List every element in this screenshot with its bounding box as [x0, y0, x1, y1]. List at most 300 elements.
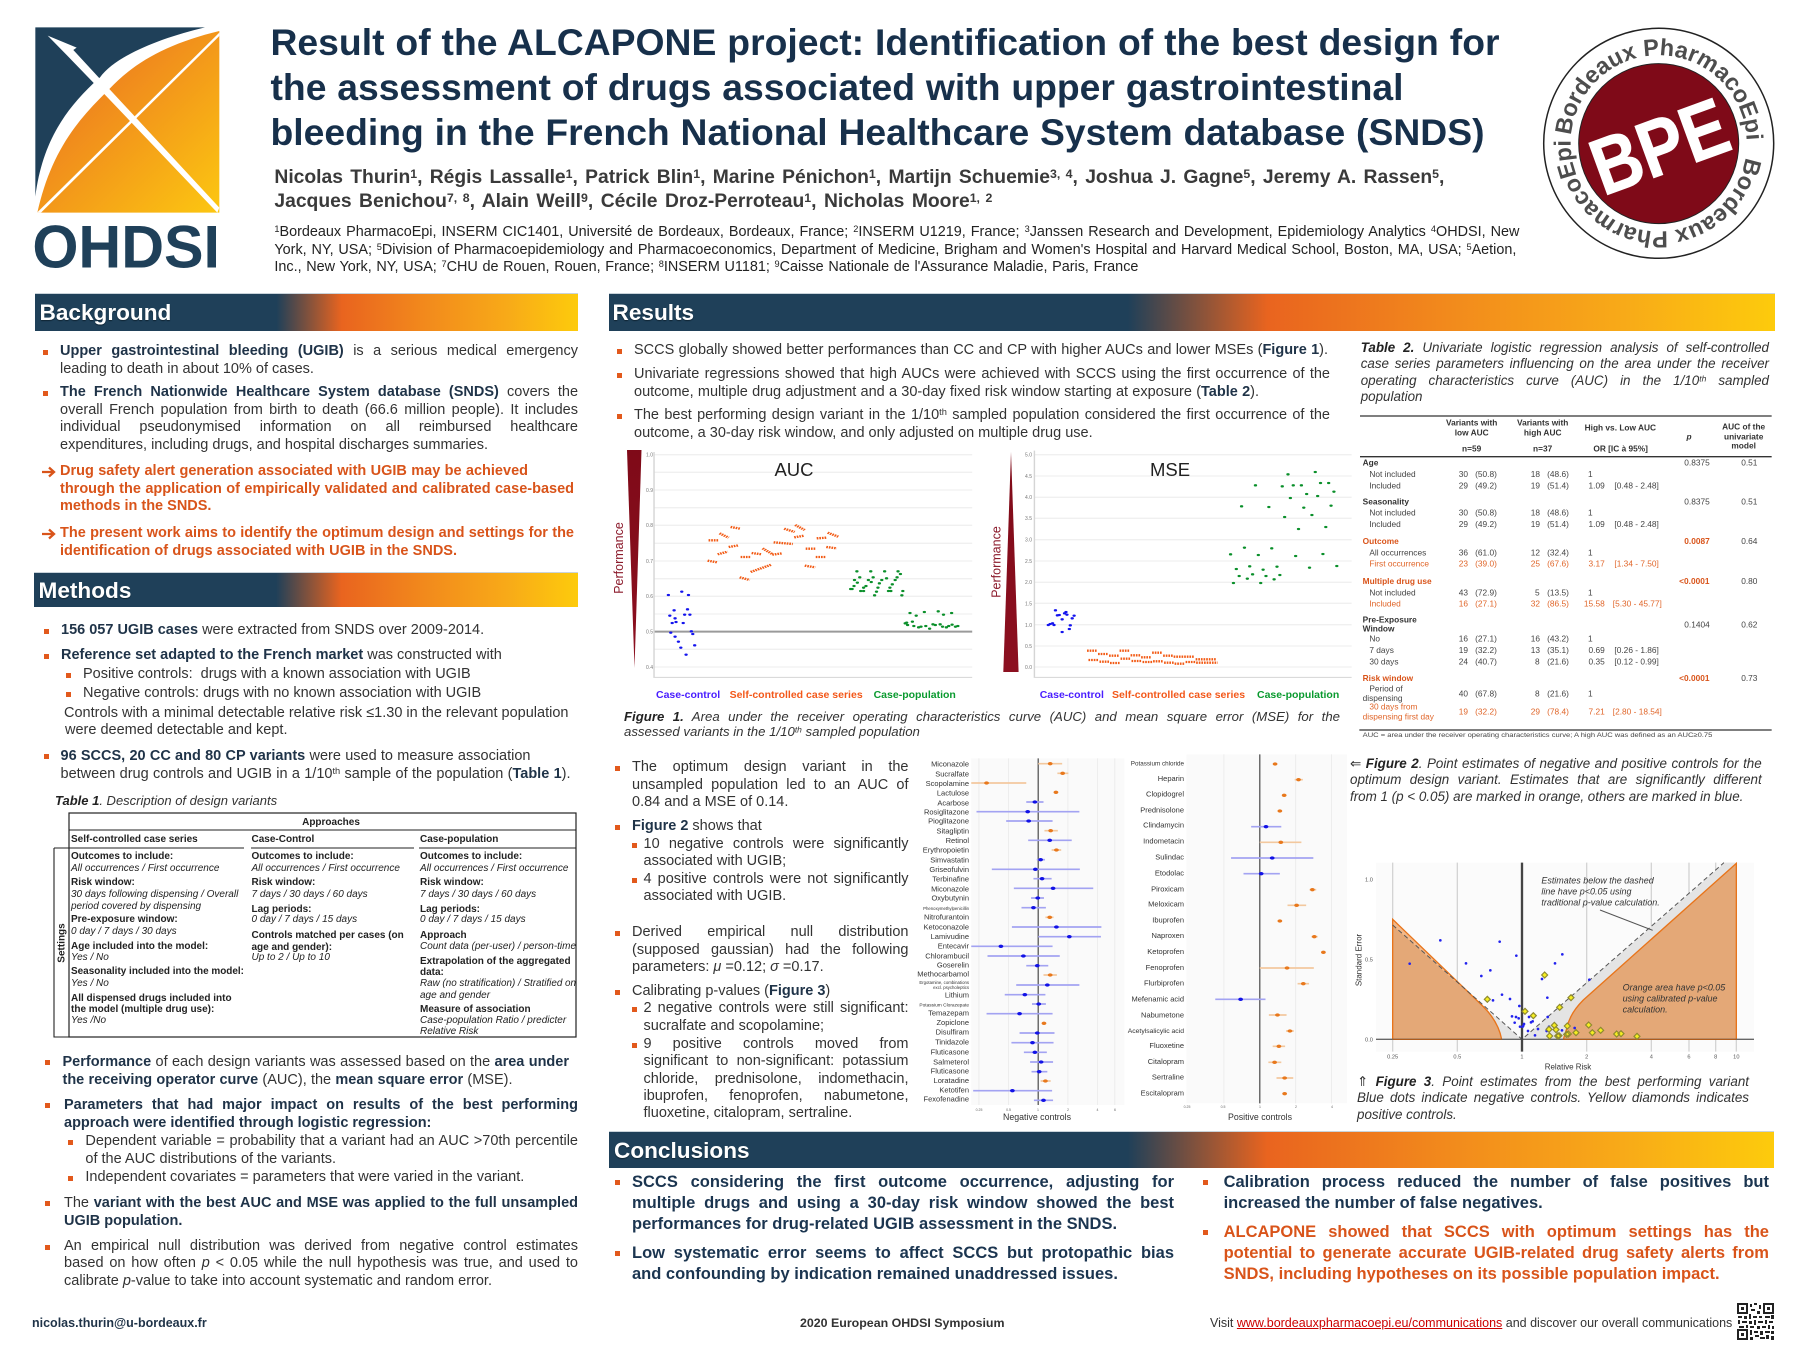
- text: independent covariates: Independent covariates = parameters that were varied in the variant.: [85, 1169, 524, 1185]
- table 1: description of design variants: Extrapolation of the aggregated: [420, 956, 571, 967]
- figure 2: positive controls forest plot: 4: [1331, 1105, 1333, 1109]
- figure 1: AUC strip chart: 1.0: [646, 452, 653, 458]
- logo: OHDSI: [32, 27, 220, 281]
- figure 2: negative controls forest plot: Loratadine: [934, 1076, 969, 1085]
- figure 1: AUC strip chart: [646, 452, 972, 677]
- figure 2: negative controls forest plot: Methocarbamol: [917, 970, 969, 979]
- caption: figure 2: [1350, 756, 1762, 804]
- table 1: description of design variants: Count data (per-user) / person-time: [420, 941, 576, 952]
- text: reference set: were deemed detectable and kept.: [65, 722, 287, 738]
- table 2: univariate logistic regression: Included: [1369, 480, 1401, 490]
- heading: Background: [34, 293, 578, 331]
- caption: table 1: Table 1. Description of design variants: [55, 793, 277, 808]
- text: best variant in sample: [617, 407, 1330, 441]
- text: empirical null parameters: [615, 924, 908, 975]
- text: best variant: UGIB population.: [64, 1213, 182, 1229]
- table 1: description of design variants: Settings: [56, 923, 68, 963]
- figure 2: negative controls forest plot: Ergotamine, combinations: [919, 980, 969, 985]
- table 2: univariate logistic regression: Included: [1369, 519, 1401, 529]
- table 2: univariate logistic regression: n=37: [1533, 443, 1553, 453]
- authors: Nicolas Thurin1, Régis Lassalle1, Patrick Blin1, Marine Pénichon1, Martijn Schuemie3, 4, Joshua J. Gagne5, Jeremy A. Rassen5,: [274, 167, 1444, 188]
- callout: drug safety alert generation: Drug safety alert generation associated with UGIB may be achieved: [60, 463, 528, 479]
- table 2: univariate logistic regression: 16: [1459, 599, 1468, 609]
- text: reference set: Controls with a minimal detectable relative risk ≤1.30 in the relevant population: [64, 705, 568, 721]
- text: univariate regressions: outcome, multiple drug adjustment and a 30-day fixed risk window starting at exposure (Table 2).: [634, 384, 1259, 400]
- text: empirical null parameters: (supposed gaussian) had the following: [632, 942, 908, 958]
- heading: Background: Background: [40, 300, 171, 325]
- heading: Conclusions: [609, 1131, 1774, 1168]
- table 2: univariate logistic regression: (50.8): [1475, 508, 1497, 518]
- conclusion: calibration process: [1203, 1173, 1769, 1212]
- table 2: univariate logistic regression: Seasonality: [1363, 496, 1409, 506]
- figure 1: AUC strip chart: AUC: [774, 459, 814, 480]
- figure 2: negative controls forest plot: Oxybutynin: [931, 894, 969, 903]
- table 2: univariate logistic regression: (51.4): [1547, 480, 1569, 490]
- text: SNDS description: The French Nationwide Healthcare System database (SNDS) covers the: [60, 384, 578, 400]
- figure 2: negative controls forest plot: [917, 758, 1124, 1122]
- caption: figure 3: [1356, 1074, 1750, 1122]
- text: figure 2 findings: Figure 2 shows that: [632, 818, 762, 834]
- table 2: univariate logistic regression: Pre-Exposure: [1363, 615, 1417, 625]
- text: variants used: 96 SCCS, 20 CC and 80 CP variants were used to measure association: [60, 748, 530, 764]
- caption: table 2: Table 2. Univariate logistic regression analysis of self-controlled: [1361, 340, 1769, 354]
- table 1: description of design variants: Controls matched per cases (on: [252, 930, 404, 941]
- text: reference set: Positive controls: drugs with a known association with UGIB: [83, 666, 471, 682]
- table 2: univariate logistic regression: 29: [1531, 706, 1540, 716]
- table 2: univariate logistic regression: 1.09: [1589, 480, 1605, 490]
- table 2: univariate logistic regression: 0.51: [1741, 457, 1758, 467]
- table 2: univariate logistic regression: 19: [1459, 645, 1468, 655]
- figure 2: positive controls forest plot: Escitalopram: [1141, 1088, 1184, 1097]
- figure 2: negative controls forest plot: Disulfiram: [936, 1028, 969, 1037]
- figure 2: positive controls forest plot: Fluoxetine: [1149, 1041, 1184, 1050]
- figure 3: funnel plot of point estimates: Orange area have p<0.05: [1623, 982, 1726, 992]
- table 2: univariate logistic regression: Outcome: [1363, 536, 1399, 546]
- table 1: description of design variants: Lag periods:: [252, 904, 312, 915]
- figure 1: legend for AUC chart: Case-population: [874, 689, 956, 701]
- table 2: univariate logistic regression: 1: [1588, 547, 1593, 557]
- text: calibrating p-values: significant to non-significant: potassium: [644, 1053, 908, 1069]
- figure 3: funnel plot of point estimates: 1.0: [1365, 877, 1373, 883]
- figure 1: MSE strip chart: 4.0: [1025, 495, 1032, 501]
- text: figure 2 findings: associated with UGIB.: [644, 888, 786, 904]
- text: calibrating p-values: [615, 983, 908, 1121]
- figure 2: negative controls forest plot: Lamivudine: [931, 932, 969, 941]
- table 2: univariate logistic regression: high AUC: [1524, 427, 1561, 437]
- text: empirical null: calibrate p-value to take into account systematic and random error.: [64, 1273, 492, 1289]
- figure 3: funnel plot of point estimates: 2: [1585, 1054, 1588, 1060]
- figure 2: positive controls forest plot: Piroxicam: [1151, 884, 1184, 893]
- table 1: description of design variants: Raw (no stratification) / Stratified on: [420, 978, 576, 989]
- table 2: univariate logistic regression: [0.12 - 0.99]: [1614, 656, 1659, 666]
- figure 2: positive controls forest plot: Acetylsalicylic acid: [1128, 1028, 1184, 1035]
- table 1: description of design variants: 0 day / 7 days / 15 days: [252, 914, 357, 925]
- logo: Bordeaux PharmacoEpi: Bordeaux PharmacoEpi: [1555, 38, 1764, 139]
- conclusion: ALCAPONE potential: ALCAPONE showed that SCCS with optimum settings has the: [1224, 1223, 1769, 1241]
- table 2: univariate logistic regression: 12: [1531, 547, 1540, 557]
- figure 2: negative controls forest plot: Ketoconazole: [924, 923, 969, 932]
- table 1: description of design variants: Self-controlled case series: [71, 834, 198, 845]
- table 2: univariate logistic regression: 24: [1459, 656, 1468, 666]
- authors: [274, 167, 1444, 212]
- table 1: description of design variants: Case-Control: [252, 834, 315, 845]
- table 2: univariate logistic regression: 0.51: [1741, 496, 1758, 506]
- figure 2: positive controls forest plot: Heparin: [1158, 774, 1184, 783]
- text: best variant: The variant with the best AUC and MSE was applied to the full unsampled: [64, 1195, 578, 1211]
- text: optimum design: [615, 759, 909, 810]
- table 1: description of design variants: Lag periods:: [420, 904, 480, 915]
- caption: figure 1: Figure 1. Area under the receiver operating characteristics curve (AUC) and mean square error (MSE) for the: [624, 709, 1340, 724]
- title: bleeding in the French National Healthcare System database (SNDS): [270, 111, 1484, 153]
- table 2: univariate logistic regression: 30 days from: [1369, 702, 1418, 712]
- figure 1: AUC strip chart: 0.4: [646, 665, 653, 671]
- title: [270, 20, 1500, 153]
- table 2: univariate logistic regression: (32.2): [1475, 706, 1497, 716]
- figure 2: positive controls forest plot: Flurbiprofen: [1144, 978, 1184, 987]
- table 2: univariate logistic regression: 1: [1588, 688, 1593, 698]
- figure 1: legend for MSE chart: Self-controlled case series: [1112, 689, 1245, 701]
- table 1: description of design variants: All dispensed drugs included into: [71, 993, 232, 1004]
- figure 3: funnel plot of point estimates: calculation.: [1623, 1005, 1668, 1015]
- table 1: description of design variants: Outcomes to include:: [71, 851, 173, 862]
- table 2: univariate logistic regression: 29: [1459, 480, 1468, 490]
- text: SNDS description: [43, 384, 578, 453]
- text: best variant in sample: The best performing design variant in the 1/10th sampled population considered the first occurrence of the: [634, 407, 1330, 423]
- figure 2: positive controls forest plot: Citalopram: [1148, 1057, 1184, 1066]
- table 2: univariate logistic regression: (35.1): [1547, 645, 1569, 655]
- table 2: univariate logistic regression: univariate: [1724, 431, 1764, 441]
- figure 1: legend for MSE chart: Case-population: [1257, 689, 1339, 701]
- text: calibrating p-values: chloride, prednisolone, indomethacin,: [644, 1071, 908, 1087]
- text: calibrating p-values: sucralfate and scopolamine;: [644, 1018, 824, 1034]
- table 2: univariate logistic regression: (21.6): [1547, 688, 1569, 698]
- conclusion: ALCAPONE potential: potential to generate accurate UGIB-related drug safety alerts from: [1224, 1244, 1769, 1262]
- table 2: univariate logistic regression: Window: [1363, 623, 1395, 633]
- text: empirical null parameters: Derived empirical null distribution: [632, 924, 908, 940]
- figure 2: negative controls forest plot: Fexofenadine: [924, 1094, 969, 1103]
- figure 1: AUC strip chart: 0.7: [646, 559, 653, 565]
- table 2: univariate logistic regression: Age: [1363, 458, 1379, 468]
- text: SCCS better: SCCS globally showed better performances than CC and CP with higher AUCs and lower MSEs (Figure 1).: [634, 342, 1328, 358]
- text: calibrating p-values: fluoxetine, citalopram, sertraline.: [644, 1105, 852, 1121]
- table 2: univariate logistic regression: (49.2): [1475, 480, 1497, 490]
- table 1: description of design variants: Outcomes to include:: [252, 851, 354, 862]
- caption: figure 1: assessed variants in the 1/10th sampled population: [624, 724, 920, 739]
- figure 3: funnel plot of point estimates: Estimates below the dashed: [1541, 875, 1655, 885]
- figure 2: positive controls forest plot: [1128, 754, 1347, 1122]
- text: variants used: between drug controls and UGIB in a 1/10th sample of the population (Table 1).: [60, 766, 571, 782]
- table 2: univariate logistic regression: 19: [1531, 519, 1540, 529]
- table 1: description of design variants: Risk window:: [252, 877, 315, 888]
- text: empirical null: An empirical null distribution was derived from negative control estimates: [64, 1238, 578, 1254]
- text: dependent variable: Dependent variable = probability that a variant had an AUC >70th percentile: [85, 1133, 578, 1149]
- figure 1: MSE strip chart: 1.5: [1025, 602, 1032, 608]
- table 1: description of design variants: age and gender):: [252, 942, 332, 953]
- footer: email: nicolas.thurin@u-bordeaux.fr: [32, 1316, 207, 1330]
- table 2: univariate logistic regression: (49.2): [1475, 519, 1497, 529]
- callout: aim of the work: [42, 525, 574, 559]
- figure 2: positive controls forest plot: 2: [1295, 1105, 1297, 1109]
- table 1: description of design variants: 30 days following dispensing / Overall: [71, 889, 239, 900]
- table 2: univariate logistic regression: 1.09: [1589, 519, 1605, 529]
- table 2: univariate logistic regression: 1: [1588, 508, 1593, 518]
- table 2: univariate logistic regression: 1: [1588, 587, 1593, 597]
- table 2: univariate logistic regression: 32: [1531, 599, 1540, 609]
- figure 3: funnel plot of point estimates: traditional p-value calculation.: [1541, 898, 1660, 908]
- figure 2: negative controls forest plot: 4: [1097, 1108, 1099, 1112]
- figure 3: funnel plot of point estimates: Standard Error: [1355, 933, 1364, 986]
- table 1: description of design variants: period covered by dispensing: [70, 901, 202, 912]
- table 1: description of design variants: [54, 813, 576, 1037]
- text: figure 2 findings: [615, 818, 908, 904]
- figure 2: negative controls forest plot: Goserelin: [937, 960, 969, 969]
- table 2: univariate logistic regression: <0.0001: [1679, 673, 1710, 683]
- table 1: description of design variants: Approach: [420, 930, 467, 941]
- figure 2: negative controls forest plot: Tinidazole: [935, 1038, 969, 1047]
- table 1: description of design variants: Risk window:: [420, 877, 484, 888]
- figure 3: funnel plot of point estimates: 0.0: [1365, 1038, 1373, 1044]
- figure 2: negative controls forest plot: Acarbose: [937, 798, 969, 807]
- logo: Bordeaux PharmacoEpi: [1542, 28, 1774, 259]
- text: figure 2 findings: 4 positive controls were not significantly: [644, 871, 908, 887]
- figure 2: positive controls forest plot: Mefenamic acid: [1131, 994, 1184, 1003]
- table 1: description of design variants: Case-population: [420, 834, 498, 845]
- text: SNDS description: overall French population from birth to death (66.6 million people). It includes: [60, 402, 578, 418]
- logo: Bordeaux PharmacoEpi: Bordeaux PharmacoEpi: [1554, 142, 1762, 248]
- table 2: univariate logistic regression: 19: [1459, 706, 1468, 716]
- text: UGIB definition: [43, 343, 578, 377]
- figure 2: positive controls forest plot: 0.5: [1221, 1105, 1225, 1109]
- figure 1: AUC strip chart: 0.5: [646, 630, 653, 636]
- table 2: univariate logistic regression: (13.5): [1547, 587, 1569, 597]
- figure 2: negative controls forest plot: Scopolamine: [926, 779, 969, 788]
- table 2: univariate logistic regression: [2.80 - 18.54]: [1613, 706, 1662, 716]
- figure 3: funnel plot of point estimates: line have p<0.05 using: [1541, 886, 1632, 896]
- callout: drug safety alert generation: [42, 463, 574, 514]
- table 2: univariate logistic regression: 23: [1459, 559, 1468, 569]
- table 2: univariate logistic regression: [0.48 - 2.48]: [1614, 480, 1659, 490]
- text: calibrating p-values: Calibrating p-values (Figure 3): [632, 983, 830, 999]
- table 2: univariate logistic regression: 0.62: [1741, 619, 1758, 629]
- table 2: univariate logistic regression: 7 days: [1369, 645, 1394, 655]
- table 2: univariate logistic regression: OR [IC à 95%]: [1593, 443, 1648, 453]
- text: UGIB cases: 156 057 UGIB cases were extracted from SNDS over 2009-2014.: [61, 622, 484, 638]
- conclusion: best SCCS settings: SCCS considering the first outcome occurrence, adjusting for: [632, 1173, 1174, 1191]
- table 1: description of design variants: Pre-exposure window:: [71, 914, 178, 925]
- table 2: univariate logistic regression: (27.1): [1475, 634, 1497, 644]
- figure 2: negative controls forest plot: Erythropoietin: [923, 846, 969, 855]
- callout: drug safety alert generation: methods in the SNDS.: [60, 498, 211, 514]
- figure 1: AUC strip chart: 0.8: [646, 523, 653, 529]
- table 2: univariate logistic regression: 0.80: [1741, 576, 1758, 586]
- figure 2: negative controls forest plot: Lithium: [945, 991, 969, 1000]
- figure 2: positive controls forest plot: Etodolac: [1155, 868, 1184, 877]
- table 1: description of design variants: Measure of association: [420, 1004, 531, 1015]
- table 2: univariate logistic regression: 3.17: [1589, 559, 1605, 569]
- table 2: univariate logistic regression: AUC of the: [1722, 422, 1766, 432]
- table 2: univariate logistic regression: 0.0087: [1684, 536, 1710, 546]
- table 2: univariate logistic regression: 18: [1531, 469, 1540, 479]
- table 2: univariate logistic regression: (86.5): [1547, 599, 1569, 609]
- figure 2: negative controls forest plot: Temazepam: [928, 1009, 969, 1018]
- figure 2: positive controls forest plot: Nabumetone: [1141, 1010, 1184, 1019]
- figure 2: negative controls forest plot: Phenoxymethylpenicillin: [923, 906, 970, 911]
- table 2: univariate logistic regression: 16: [1531, 634, 1540, 644]
- QR code: [1737, 1303, 1774, 1340]
- text: empirical null: [45, 1238, 578, 1289]
- table 1: description of design variants: 7 days / 30 days / 60 days: [252, 889, 368, 900]
- figure 2: negative controls forest plot: Chlorambucil: [925, 951, 969, 960]
- heading: Conclusions: Conclusions: [614, 1138, 750, 1163]
- table 2: univariate logistic regression: (78.4): [1547, 706, 1569, 716]
- figure 2: negative controls forest plot: Ketotifen: [939, 1086, 969, 1095]
- table 2: univariate logistic regression: 1: [1588, 634, 1593, 644]
- text: SNDS description: individual pseudonymised information on all reimbursed healthcare: [60, 419, 578, 435]
- table 2: univariate logistic regression: (48.6): [1547, 508, 1569, 518]
- table 2: univariate logistic regression: (40.7): [1475, 656, 1497, 666]
- table 1: description of design variants: 7 days / 30 days / 60 days: [420, 889, 536, 900]
- conclusion: best SCCS settings: performances for drug-related UGIB assessment in the SNDS.: [632, 1215, 1117, 1233]
- text: calibrating p-values: 2 negative controls were still significant:: [644, 1000, 908, 1016]
- table 2: univariate logistic regression: Variants with: [1517, 418, 1568, 428]
- conclusion: best SCCS settings: [615, 1173, 1174, 1233]
- figure 3: funnel plot of point estimates: 1: [1520, 1054, 1524, 1060]
- table 1: description of design variants: Age included into the model:: [71, 941, 208, 952]
- table 2: univariate logistic regression: 18: [1531, 508, 1540, 518]
- text: empirical null parameters: parameters: μ =0.12; σ =0.17.: [632, 959, 824, 975]
- table 2: univariate logistic regression: 15.58: [1584, 599, 1605, 609]
- figure 2: positive controls forest plot: 1: [1259, 1105, 1261, 1109]
- caption: table 2: population: [1361, 389, 1422, 404]
- table 2: univariate logistic regression: [1.34 - 7.50]: [1614, 559, 1659, 569]
- text: variants used: [44, 748, 571, 782]
- caption: table 2: [1360, 340, 1770, 404]
- table 2: univariate logistic regression: All occurrences: [1369, 547, 1426, 557]
- figure 2: negative controls forest plot: 0.25: [976, 1108, 982, 1112]
- table 2: univariate logistic regression: low AUC: [1455, 427, 1489, 437]
- table 2: univariate logistic regression: 30: [1459, 469, 1468, 479]
- figure 2: positive controls forest plot: Potassium chloride: [1131, 761, 1184, 768]
- table 2: univariate logistic regression: 13: [1531, 645, 1540, 655]
- table 2: univariate logistic regression: (32.2): [1475, 645, 1497, 655]
- figure 1: MSE strip chart: 1.0: [1025, 623, 1032, 629]
- figure 3: funnel plot of point estimates: using calibrated p-value: [1623, 993, 1718, 1003]
- figure 1: AUC strip chart: 0.9: [646, 488, 653, 494]
- figure 1: MSE strip chart: 0.0: [1025, 665, 1032, 671]
- text: dependent variable: of the AUC distributions of the variants.: [85, 1151, 336, 1167]
- figure 1: legend for AUC chart: [656, 689, 956, 701]
- table 1: description of design variants: age and gender: [420, 990, 491, 1001]
- text: performance: the receiving operator curve (AUC), the mean square error (MSE).: [62, 1072, 513, 1088]
- heading: Results: Results: [612, 300, 694, 325]
- figure 1: performance wedge for MSE: Performance: [990, 526, 1004, 598]
- table 2: univariate logistic regression: 5: [1535, 587, 1540, 597]
- table 2: univariate logistic regression: Variants with: [1446, 418, 1497, 428]
- figure 2: negative controls forest plot: 0.5: [1006, 1108, 1011, 1112]
- table 2: univariate logistic regression: 43: [1459, 587, 1468, 597]
- text: best variant: [45, 1195, 578, 1229]
- table 2: univariate logistic regression: 19: [1531, 480, 1540, 490]
- conclusion: best SCCS settings: multiple drugs and using a 30-day risk window showed the best: [632, 1194, 1174, 1212]
- heading: Results: [609, 293, 1775, 331]
- table 2: univariate logistic regression: 7.21: [1589, 706, 1605, 716]
- figure 1: performance wedge for MSE: [990, 452, 1019, 672]
- caption: figure 2: optimum design variant. Estimates that are significantly different: [1350, 772, 1762, 787]
- text: performance: [45, 1054, 569, 1088]
- table 2: univariate logistic regression: (72.9): [1475, 587, 1497, 597]
- text: figure 2 findings: associated with UGIB;: [644, 853, 786, 869]
- logo: OHDSI: OHDSI: [32, 213, 220, 281]
- figure 2: negative controls forest plot: Lactulose: [937, 788, 969, 797]
- table 2: univariate logistic regression: 0.69: [1589, 645, 1605, 655]
- figure 3: funnel plot of point estimates: 6: [1687, 1054, 1691, 1060]
- figure 1: MSE strip chart: MSE: [1150, 459, 1190, 480]
- caption: figure 3: ⇑ Figure 3. Point estimates from the best performing variant: [1357, 1074, 1749, 1088]
- table 2: univariate logistic regression: 8: [1535, 656, 1540, 666]
- table 2: univariate logistic regression: Risk window: [1363, 673, 1414, 683]
- text: optimum design: 0.84 and a MSE of 0.14.: [632, 794, 788, 810]
- table 1: description of design variants: All occurrences / First occurrence: [70, 863, 220, 874]
- text: UGIB definition: Upper gastrointestinal bleeding (UGIB) is a serious medical emergency: [60, 343, 578, 359]
- figure 2: positive controls forest plot: 0.25: [1184, 1105, 1190, 1109]
- figure 2: negative controls forest plot: Miconazole: [931, 884, 969, 893]
- table 1: description of design variants: the model (multiple drug use):: [71, 1004, 214, 1015]
- authors: Jacques Benichou7, 8, Alain Weill9, Cécile Droz-Perroteau1, Nicholas Moore1, 2: [274, 191, 992, 212]
- text: parameters: [45, 1097, 578, 1131]
- table 2: univariate logistic regression: High vs. Low AUC: [1585, 422, 1656, 432]
- caption: table 2: operating characteristics curve (AUC) in the 1/10th sampled: [1361, 373, 1769, 388]
- table 2: univariate logistic regression: n=59: [1462, 443, 1482, 453]
- figure 3: funnel plot of point estimates: 0.5: [1365, 958, 1373, 964]
- table 1: description of design variants: All occurrences / First occurrence: [419, 863, 569, 874]
- callout: drug safety alert generation: through the application of empirically validated and calibrated case-based: [60, 481, 574, 497]
- figure 2: negative controls forest plot: Rosiglitazone: [924, 807, 969, 816]
- figure 2: negative controls forest plot: Miconazole: [931, 759, 969, 768]
- table 1: description of design variants: Up to 2 / Up to 10: [252, 952, 330, 963]
- caption: figure 3: Blue dots indicate negative controls. Yellow diamonds indicates: [1357, 1090, 1749, 1105]
- text: performance: Performance of each design variants was assessed based on the area under: [62, 1054, 569, 1070]
- table 1: description of design variants: All occurrences / First occurrence: [250, 863, 400, 874]
- conclusion: ALCAPONE potential: SNDS, including hypotheses on its possible population impact.: [1224, 1265, 1720, 1283]
- text: calibrating p-values: ibuprofen, fenoprofen, nabumetone,: [644, 1088, 908, 1104]
- table 1: description of design variants: Case-population Ratio / predicter: [420, 1015, 567, 1026]
- table 1: description of design variants: Yes / No: [71, 978, 109, 989]
- text: parameters: Parameters that had major impact on results of the best performing: [64, 1097, 578, 1113]
- figure 2: positive controls forest plot: Sertraline: [1152, 1073, 1184, 1082]
- figure 2: positive controls forest plot: Prednisolone: [1140, 805, 1184, 814]
- figure 3: funnel plot of point estimates: 4: [1650, 1054, 1653, 1060]
- figure 1: legend for MSE chart: [1040, 689, 1339, 701]
- conclusion: calibration process: Calibration process reduced the number of false positives but: [1224, 1173, 1769, 1191]
- text: dependent variable: [68, 1133, 578, 1167]
- figure 1: legend for AUC chart: Self-controlled case series: [730, 689, 863, 701]
- caption: figure 2: from 1 (p < 0.05) are marked in orange, others are marked in blue.: [1350, 789, 1743, 804]
- text: optimum design: unsampled population led to an AUC of: [632, 777, 908, 793]
- text: empirical null: based on how often p < 0.05 while the null hypothesis was true, and used to: [64, 1255, 578, 1271]
- figure 2: positive controls forest plot: Clindamycin: [1143, 821, 1184, 830]
- figure 2: negative controls forest plot: Salmeterol: [933, 1057, 969, 1066]
- table 2: univariate logistic regression: (61.0): [1475, 547, 1497, 557]
- figure 3: funnel plot of point estimates: Relative Risk: [1545, 1062, 1591, 1071]
- table 2: univariate logistic regression: (39.0): [1475, 559, 1497, 569]
- text: best variant in sample: outcome, a 30-day risk window, and only adjusted on multiple drug use.: [634, 425, 1093, 441]
- conclusion: systematic error: Low systematic error seems to affect SCCS but protopathic bias: [632, 1244, 1174, 1262]
- table 2: univariate logistic regression: (43.2): [1547, 634, 1569, 644]
- figure 1: AUC strip chart: 0.6: [646, 594, 653, 600]
- affiliations: Inc., New York, NY, USA; 7CHU de Rouen, Rouen, France; 8INSERM U1181; 9Caisse Nationale de l'Assurance Maladie, Paris, France: [274, 259, 1138, 275]
- conclusion: systematic error: [615, 1244, 1174, 1283]
- figure 2: negative controls forest plot: Terbinafine: [932, 874, 969, 883]
